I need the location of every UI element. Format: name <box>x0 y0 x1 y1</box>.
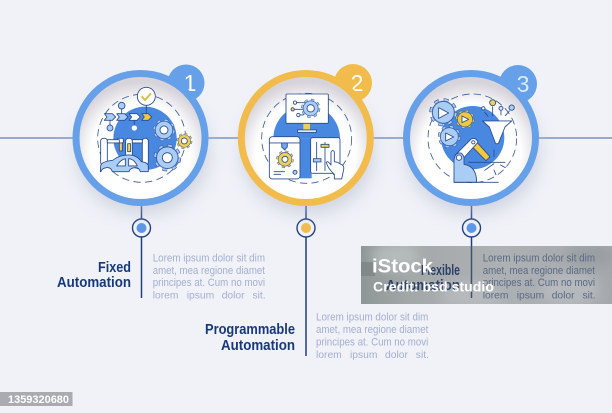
text block: step 1 description: lorem <box>153 290 178 302</box>
text block: step 1 description <box>153 252 266 302</box>
text block: step 3 description: dolor <box>552 290 575 302</box>
badge: number 1 <box>168 64 204 102</box>
heading: Flexible Automation: Flexible <box>421 263 460 279</box>
watermark text: iStock <box>372 256 433 278</box>
text block: step 1 description: ipsum <box>187 290 214 302</box>
badge: number 1: 1 <box>184 70 196 96</box>
heading: Fixed Automation: Automation <box>57 275 131 291</box>
watermark text <box>372 256 494 294</box>
text block: step 3 description: amet, mea regione diamet <box>483 265 596 277</box>
heading: Programmable Automation: Programmable <box>205 322 295 338</box>
panel: step 2 circle <box>238 64 374 214</box>
panel: step 1 circle <box>72 64 209 214</box>
connector: step 3 lower <box>470 246 472 298</box>
text block: step 1 description: dolor <box>222 290 245 302</box>
heading: Fixed Automation <box>57 260 131 291</box>
text block: step 1 description: sit. <box>252 290 266 302</box>
text block: step 3 description: sit. <box>582 290 596 302</box>
connector: step 1 <box>132 204 150 298</box>
text block: step 3 description <box>483 252 596 302</box>
text block: step 2 description: lorem <box>316 350 342 361</box>
text block: step 2 description: amet, mea regione diamet <box>316 324 429 336</box>
text block: step 3 description: Lorem ipsum dolor sit dim <box>483 252 595 264</box>
text block: step 2 description: principes at. Cum no movi <box>316 336 428 348</box>
text block: step 2 description: dolor <box>385 350 408 361</box>
text block: step 3 description: lorem <box>483 290 508 302</box>
text block: step 1 description: Lorem ipsum dolor sit dim <box>153 252 265 264</box>
text block: step 1 description: principes at. Cum no movi <box>153 277 265 289</box>
heading: Programmable Automation: Automation <box>221 338 295 354</box>
text block: step 3 description: principes at. Cum no movi <box>483 277 595 289</box>
badge: number 3 <box>499 65 537 103</box>
connector: step 3 top <box>462 204 480 246</box>
icon: fixed automation <box>98 87 191 182</box>
text block: step 2 description: Lorem ipsum dolor sit dim <box>316 312 428 324</box>
timeline axis <box>0 137 612 139</box>
image id tag: 1359320680 <box>8 394 69 406</box>
heading: Flexible Automation <box>386 263 460 294</box>
panel: step 3 circle <box>403 65 539 214</box>
text block: step 2 description: sit. <box>416 350 429 361</box>
badge: number 2: 2 <box>351 70 363 96</box>
text block: step 1 description: amet, mea regione diamet <box>153 265 266 277</box>
heading: Flexible Automation: Automation <box>386 278 460 294</box>
icon: flexible automation <box>428 94 517 183</box>
heading: Fixed Automation: Fixed <box>98 260 131 276</box>
icon: programmable automation <box>262 93 352 183</box>
badge: number 2 <box>334 64 372 102</box>
text block: step 3 description: ipsum <box>517 290 544 302</box>
badge: number 3: 3 <box>517 71 529 97</box>
text block: step 2 description: ipsum <box>350 350 377 361</box>
watermark text: Credit: bsd studio <box>373 278 494 294</box>
connector: step 2 <box>297 204 315 356</box>
robot frames <box>101 138 148 165</box>
heading: Programmable Automation <box>205 322 295 354</box>
watermark band <box>361 242 612 310</box>
text block: step 2 description <box>316 312 429 361</box>
